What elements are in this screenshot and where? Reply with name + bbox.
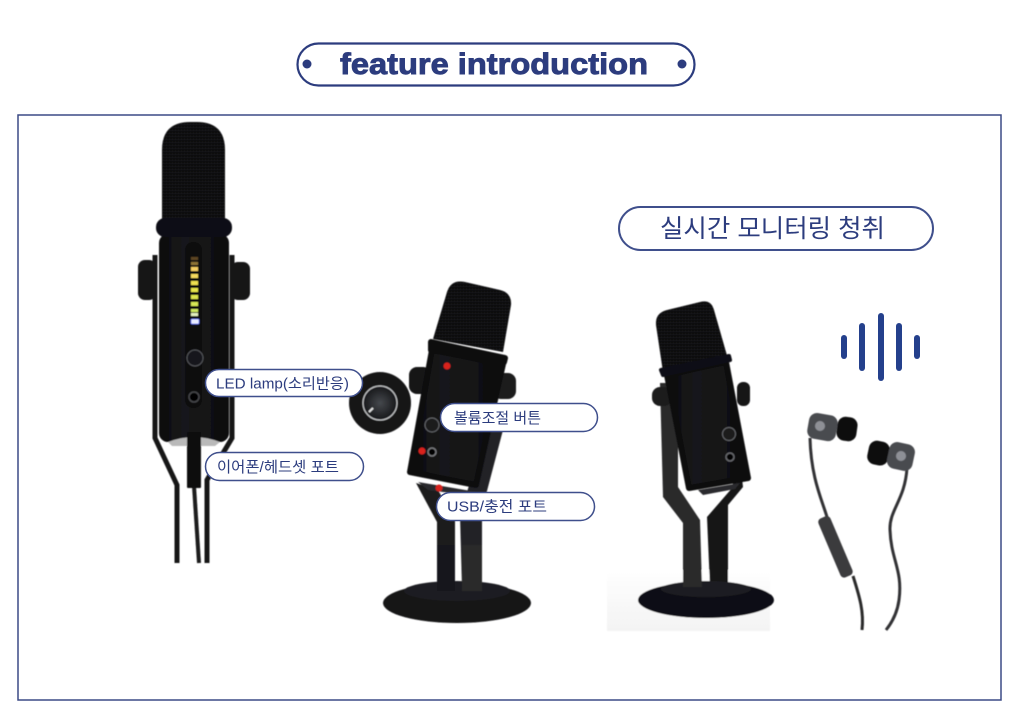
pill: real-time monitoring: 실시간 모니터링 청취 <box>660 215 885 243</box>
volume knob detail inset <box>349 372 411 434</box>
microphone angled right with stand <box>607 301 774 631</box>
LED level meter <box>191 257 199 324</box>
label: earphone port <box>206 452 364 480</box>
microphone angled left with stand <box>383 281 531 623</box>
label: USB charging port: USB/충전 포트 <box>447 498 547 516</box>
red marker dots <box>418 362 450 492</box>
label: volume button <box>440 404 598 432</box>
label: LED lamp <box>206 370 362 396</box>
microphone front view with cables <box>138 122 250 563</box>
label: USB charging port <box>436 492 594 520</box>
title pill <box>298 44 694 86</box>
label: LED lamp: LED lamp(소리반응) <box>216 376 349 392</box>
title pill: feature introduction <box>340 48 648 81</box>
label: earphone port: 이어폰/헤드셋 포트 <box>217 459 339 476</box>
label: volume button: 볼륨조절 버튼 <box>454 410 541 427</box>
main panel frame <box>18 115 1001 700</box>
icon: sound wave <box>841 313 920 381</box>
pill: real-time monitoring <box>619 207 933 250</box>
earphones <box>806 412 916 630</box>
